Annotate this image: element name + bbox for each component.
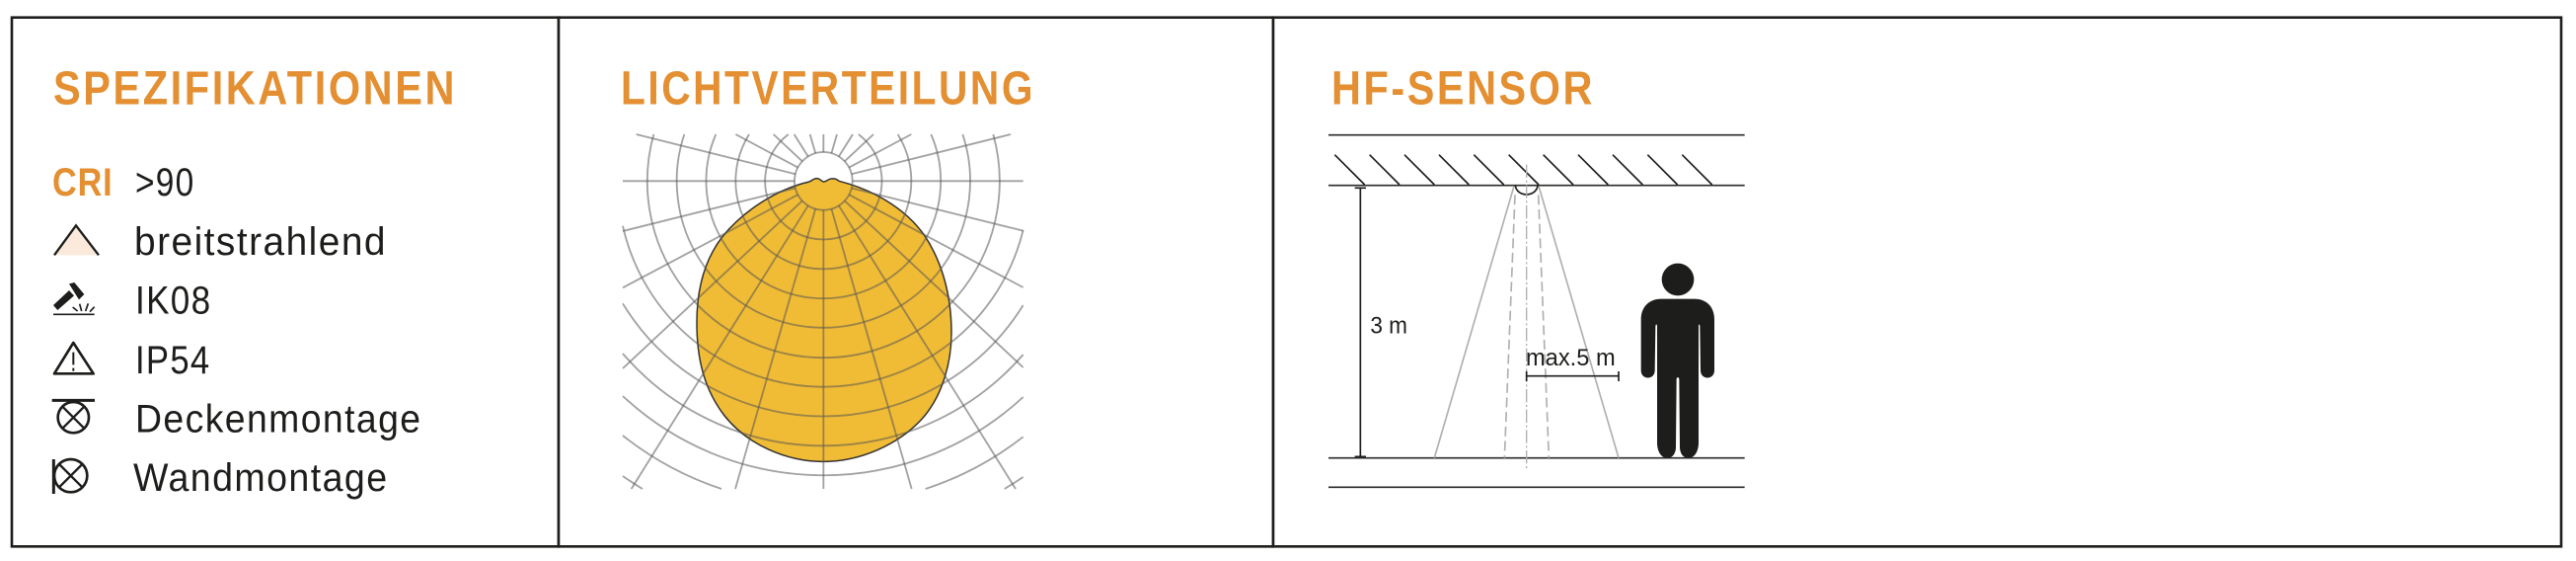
range dimension xyxy=(1527,371,1619,381)
icon: warning triangle xyxy=(54,343,94,373)
heading: Spezifikationen: SPEZIFIKATIONEN xyxy=(53,63,457,115)
heading: HF sensor: HF-SENSOR xyxy=(1331,63,1595,115)
center axis xyxy=(1525,165,1529,470)
shape: distribution curve xyxy=(697,179,951,461)
panel: light distribution xyxy=(559,18,1273,546)
ceiling hatching xyxy=(1334,155,1712,185)
diagram: sensor detection range xyxy=(1328,135,1745,487)
text: ceiling mount: Deckenmontage xyxy=(135,397,422,441)
icon: wall mount xyxy=(53,459,87,494)
icon: ceiling mount xyxy=(52,400,95,433)
text: ingress protection: IP54 xyxy=(135,339,211,382)
inner dashed cone xyxy=(1504,195,1549,458)
icon: wide beam xyxy=(54,225,99,255)
text: wall mount: Wandmontage xyxy=(133,456,389,500)
horizontal reference lines xyxy=(1328,135,1745,487)
detection cone xyxy=(1434,186,1619,458)
icon: impact hammer xyxy=(53,282,95,314)
panel: HF sensor xyxy=(1273,18,2561,546)
grid: polar rings and spokes xyxy=(623,134,1023,489)
height dimension xyxy=(1355,188,1366,456)
panel: specifications xyxy=(12,18,559,546)
label: max range: max.5 m xyxy=(1526,345,1616,371)
heading: light distribution: LICHTVERTEILUNG xyxy=(621,63,1035,115)
sensor xyxy=(1515,186,1538,195)
text: impact rating: IK08 xyxy=(135,279,211,322)
label: height: 3 m xyxy=(1370,313,1407,340)
text: wide beam: breitstrahlend xyxy=(134,220,387,264)
label: CRI: CRI xyxy=(52,161,113,204)
text: CRI value: >90 xyxy=(135,161,195,204)
icon: person xyxy=(1641,264,1714,458)
chart: polar light distribution xyxy=(623,134,1023,489)
